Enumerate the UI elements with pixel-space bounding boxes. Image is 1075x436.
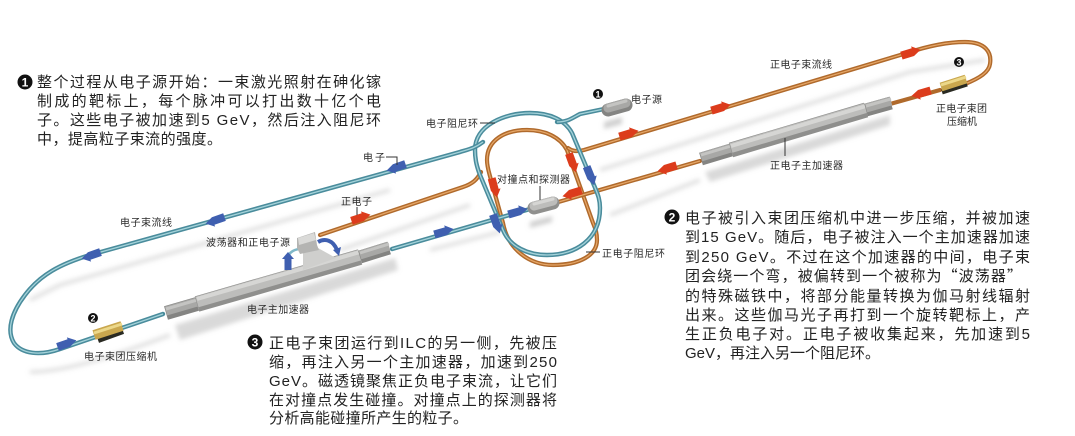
label: positron bunch compressor [936, 102, 987, 128]
marker 1 on diagram [593, 89, 603, 100]
label: positron [341, 195, 372, 215]
label: positron bunch compressor: 压缩机 [947, 115, 977, 128]
label: positron damping ring: 正电子阻尼环 [602, 247, 665, 260]
label: electron bunch compressor: 电子束团压缩机 [84, 350, 157, 363]
text block: step 3: GeV。磁透镜聚焦正负电子束流，让它们 [269, 372, 557, 390]
label: electron beamline: 电子束流线 [120, 216, 172, 229]
undulator and positron source [282, 232, 341, 270]
label: collision point and detector [497, 173, 570, 200]
text block: step 2: 的特殊磁铁中，将部分能量转换为伽马射线辐射 [685, 288, 1030, 305]
text block: step 2: 2 [669, 210, 676, 224]
label: positron bunch compressor: 正电子束团 [936, 102, 987, 115]
label: positron: 正电子 [341, 195, 372, 208]
text block: step 3: 缩，再注入另一个主加速器，加速到250 [269, 354, 557, 371]
positron main accelerator [701, 99, 891, 159]
label: electron damping ring: 电子阻尼环 [426, 117, 478, 130]
text block: step 2: 到15 GeV。随后，电子被注入一个主加速器加速 [685, 229, 1030, 246]
marker 3 on diagram: 3 [956, 58, 962, 68]
text block: step 1: 中，提高粒子束流的强度。 [37, 131, 222, 148]
text block: step 2: 团会绕一个弯，被偏转到一个被称为“波荡器” [685, 265, 1022, 286]
label: positron main accelerator [770, 138, 843, 172]
label: electron main accelerator: 电子主加速器 [247, 303, 309, 316]
text block: step 3: 3 [252, 336, 259, 350]
marker 1 on diagram: 1 [595, 90, 601, 100]
electron arrows [56, 160, 600, 351]
label: undulator and positron source: 波荡器和正电子源 [206, 236, 290, 249]
text block: step 1: 制成的靶标上，每个脉冲可以打出数十亿个电 [37, 93, 381, 110]
text block: step 2: 电子被引入束团压缩机中进一步压缩，并被加速 [685, 210, 1030, 227]
text block: step 2: 生正负电子对。正电子被收集起来，先加速到5 [685, 326, 1030, 343]
electron bunch compressor [94, 324, 123, 340]
text block: step 2: 到250 GeV。不过在这个加速器的中间，电子束 [685, 249, 1030, 266]
positron bunch compressor [941, 77, 967, 92]
text block: step 1: 1 [22, 76, 29, 90]
label: electron damping ring [426, 117, 495, 130]
text block: step 1: 子。这些电子被加速到5 GeV，然后注入阻尼环 [37, 112, 381, 129]
text block: step 3: 分析高能碰撞所产生的粒子。 [269, 409, 468, 427]
electron damping ring [475, 113, 600, 255]
text block: step 2: 出来。这些伽马光子再打到一个旋转靶标上，产 [685, 307, 1030, 324]
text block: step 1 [18, 74, 381, 148]
detector at collision point [534, 199, 553, 208]
positron beamline [320, 42, 990, 235]
positron damping ring [487, 130, 597, 265]
marker 3 on diagram [954, 57, 964, 68]
text block: step 2 [664, 210, 1030, 362]
text block: step 3 [248, 334, 557, 427]
marker 2 on diagram: 2 [90, 314, 96, 324]
floor shadows [30, 60, 985, 372]
label: positron damping ring [586, 247, 665, 260]
label: positron beamline: 正电子束流线 [770, 58, 832, 71]
label: collision point and detector: 对撞点和探测器 [497, 173, 570, 186]
label: electron source: 电子源 [631, 93, 662, 106]
label: electron [363, 151, 397, 165]
electron main accelerator [166, 244, 389, 313]
text block: step 3: 正电子束团运行到ILC的另一侧，先被压 [269, 335, 557, 352]
text block: step 2: GeV，再注入另一个阻尼环。 [685, 345, 880, 362]
electron source [608, 101, 626, 110]
label: positron main accelerator: 正电子主加速器 [770, 159, 843, 172]
electron beamline [10, 109, 604, 353]
text block: step 1: 整个过程从电子源开始：一束激光照射在砷化镓 [37, 74, 381, 91]
positron arrows [350, 44, 932, 225]
marker 2 on diagram [88, 313, 98, 324]
label: electron: 电子 [363, 151, 385, 164]
text block: step 3: 在对撞点发生碰撞。对撞点上的探测器将 [269, 391, 557, 409]
